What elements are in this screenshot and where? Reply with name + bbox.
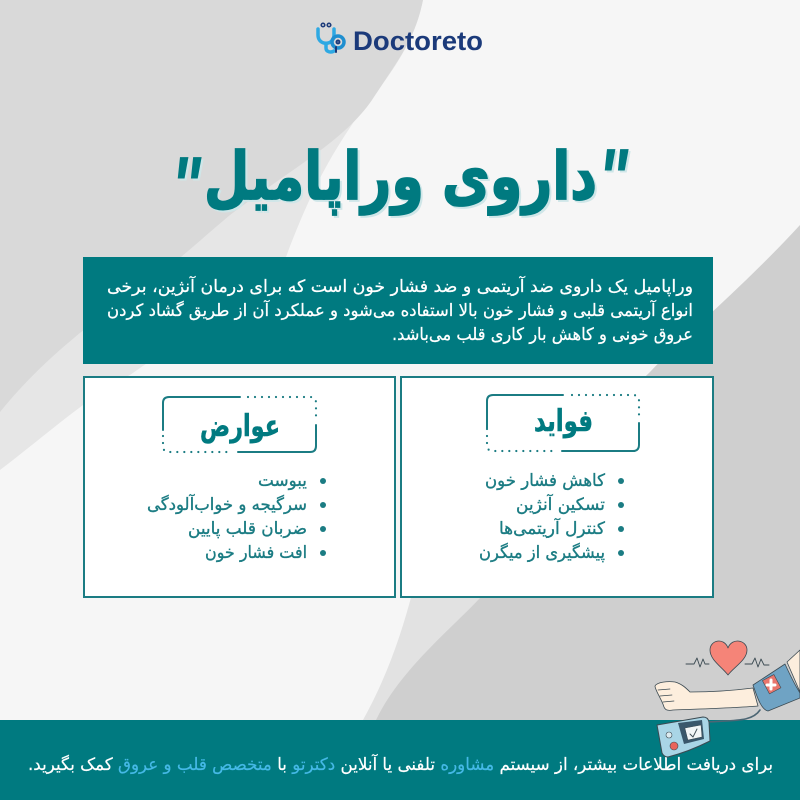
panel: side effects [84, 377, 395, 597]
icon: heart [710, 641, 747, 675]
intro text: وراپامیل یک داروی ضد آریتمی و ضد فشار خون است که برای درمان آنژین، برخی [107, 275, 693, 297]
heading: benefits: فواید [534, 404, 593, 439]
panel: introduction [83, 257, 713, 364]
benefits list [479, 471, 624, 563]
footer band [0, 720, 800, 800]
side effects list: یبوست [258, 471, 307, 491]
cuff [753, 664, 800, 711]
arm [655, 682, 758, 710]
benefits list: کاهش فشار خون [485, 471, 606, 491]
intro text [107, 275, 693, 345]
intro text: انواع آریتمی قلبی و فشار خون بالا استفاده می‌شود و عملکرد آن از طریق گشاد کردن [107, 299, 693, 321]
side effects list: افت فشار خون [205, 543, 307, 563]
side effects list [147, 471, 326, 563]
title text: داروی وراپامیل [204, 138, 597, 216]
intro text: عروق خونی و کاهش بار کاری قلب می‌باشد. [392, 325, 693, 345]
panel: benefits [401, 377, 713, 597]
title [171, 132, 629, 235]
side effects list: سرگیجه و خواب‌آلودگی [147, 493, 307, 515]
title opening quote: " [598, 132, 629, 227]
illustration: blood pressure measurement [655, 641, 800, 757]
monitor [657, 717, 710, 757]
icon: stethoscope [318, 24, 344, 52]
benefits list: تسکین آنژین [516, 493, 605, 515]
footer text: برای دریافت اطلاعات بیشتر، از سیستم مشاوره تلفنی یا آنلاین دکترتو با متخصص قلب و عروق کمک بگیرید. [28, 753, 773, 775]
heading: side effects: عوارض [200, 409, 280, 444]
heading frame [163, 397, 316, 452]
title closing quote: " [171, 140, 202, 235]
logo: Doctoreto [318, 24, 483, 56]
heading frame [487, 395, 639, 451]
cuff badge [762, 675, 781, 694]
tube [707, 710, 760, 722]
pulse lines [686, 658, 769, 667]
benefits list: کنترل آریتمی‌ها [499, 517, 606, 539]
logo wordmark: Doctoreto [353, 26, 483, 56]
benefits list: پیشگیری از میگرن [479, 542, 605, 563]
side effects list: ضربان قلب پایین [188, 519, 307, 539]
